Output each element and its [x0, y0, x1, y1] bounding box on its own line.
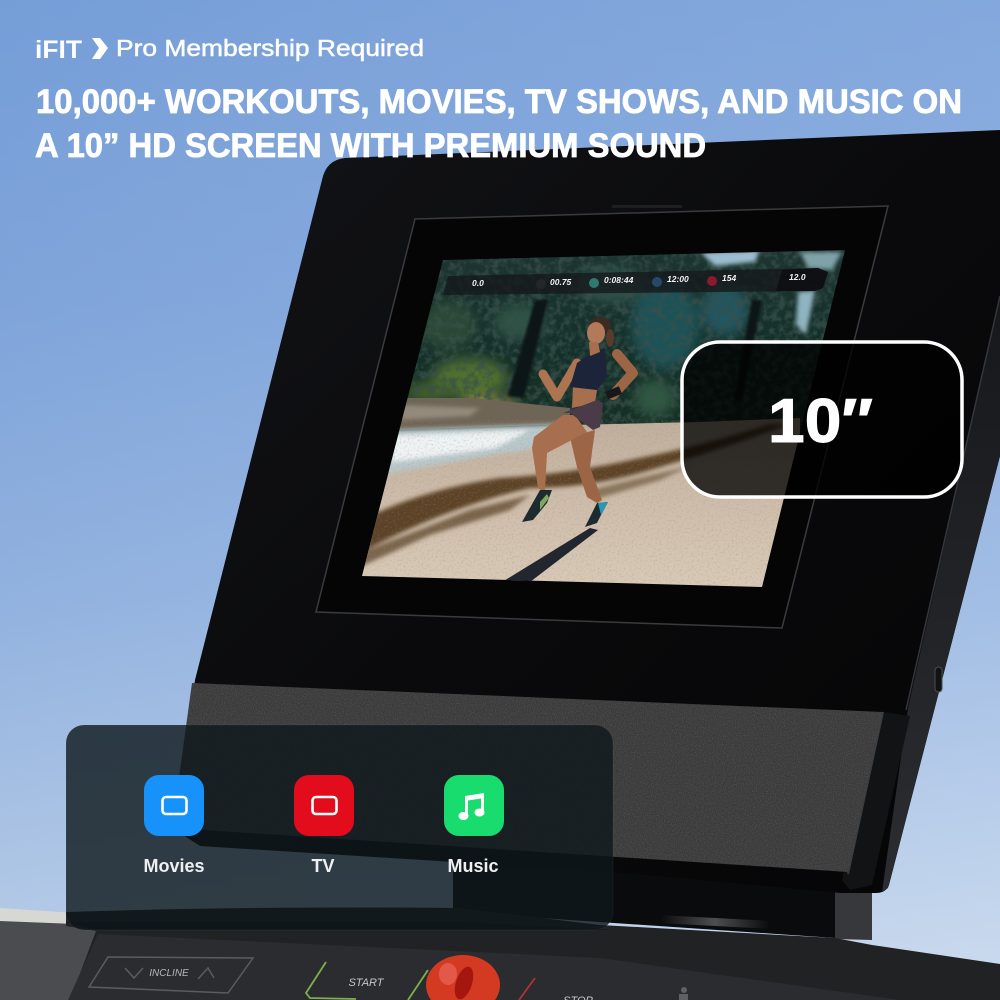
- rock texture: [366, 420, 782, 586]
- wrist band: [605, 386, 622, 399]
- start label: START: [348, 977, 385, 989]
- stat values: [472, 272, 806, 288]
- back leg: [570, 430, 602, 503]
- back shoe: [585, 502, 608, 527]
- title: [35, 83, 962, 165]
- raised leg: [532, 415, 587, 492]
- treadmill upright stand: [453, 860, 872, 940]
- title: A 10” HD SCREEN WITH PREMIUM SOUND: [35, 127, 706, 165]
- icon: movies: [144, 775, 204, 836]
- tree trunks: [508, 300, 762, 400]
- red safety knob: [426, 955, 500, 1000]
- stat values: 0:08:44: [604, 275, 634, 285]
- midriff: [572, 387, 597, 408]
- stop button outline: [519, 978, 535, 1000]
- ifit logo: iFIT: [35, 36, 82, 64]
- console face: [68, 934, 1000, 1000]
- sunlit foliage patches: [404, 269, 749, 416]
- arms: [543, 354, 633, 397]
- membership text: Pro Membership Required: [116, 35, 424, 61]
- stat values: 00.75: [550, 277, 572, 287]
- usb port: [935, 667, 942, 692]
- icon: tv: [294, 775, 354, 836]
- stat circles: [536, 276, 717, 289]
- head: [587, 322, 605, 344]
- title: 10,000+ WORKOUTS, MOVIES, TV SHOWS, AND MUSIC ON: [36, 83, 962, 121]
- start button outline: [306, 962, 428, 1000]
- speed end pill: [776, 268, 828, 291]
- screen stats bar: [443, 268, 828, 295]
- icon: music: [444, 775, 504, 836]
- side frame strip: [882, 296, 1000, 892]
- hair: [589, 317, 611, 333]
- console upper band: [66, 908, 1000, 1000]
- brown rock streaks: [362, 424, 790, 566]
- sky gaps between trees: [700, 250, 842, 335]
- stat values: 12:00: [667, 274, 689, 284]
- speaker end cap: [842, 712, 910, 890]
- incline button: [89, 957, 253, 993]
- sand ground: [350, 418, 800, 600]
- raised shoe: [522, 490, 552, 522]
- icon: chevron: [92, 38, 108, 59]
- small person icon: [679, 987, 688, 1000]
- treadmill deck and ground at lower left: [0, 908, 1000, 1000]
- tablet bezel: [316, 205, 888, 628]
- river water: [385, 424, 560, 474]
- callout value: 10″: [768, 387, 873, 456]
- tablet body: [172, 130, 1000, 893]
- console shadow strip: [66, 922, 613, 930]
- runner figure: [522, 317, 633, 527]
- panel: media types: [66, 725, 613, 930]
- label: tv: TV: [311, 856, 335, 876]
- fabric speaker bar: [172, 683, 883, 872]
- screen video scene: [350, 245, 850, 600]
- stat values: 0.0: [472, 278, 484, 288]
- membership line: [35, 35, 424, 64]
- runner shadow: [502, 528, 598, 582]
- rock ledge: [395, 398, 570, 430]
- label: music: Music: [447, 856, 499, 876]
- foliage texture: [408, 250, 844, 424]
- incline label: INCLINE: [149, 968, 189, 979]
- treadmill console: [66, 908, 1000, 1000]
- tank top: [570, 348, 607, 390]
- forest backdrop: [396, 250, 845, 444]
- shorts: [563, 400, 603, 430]
- label: movies: Movies: [143, 856, 205, 876]
- stat values: 154: [722, 273, 736, 283]
- callout: 10 inch: [682, 342, 962, 497]
- stat values: 12.0: [789, 272, 806, 282]
